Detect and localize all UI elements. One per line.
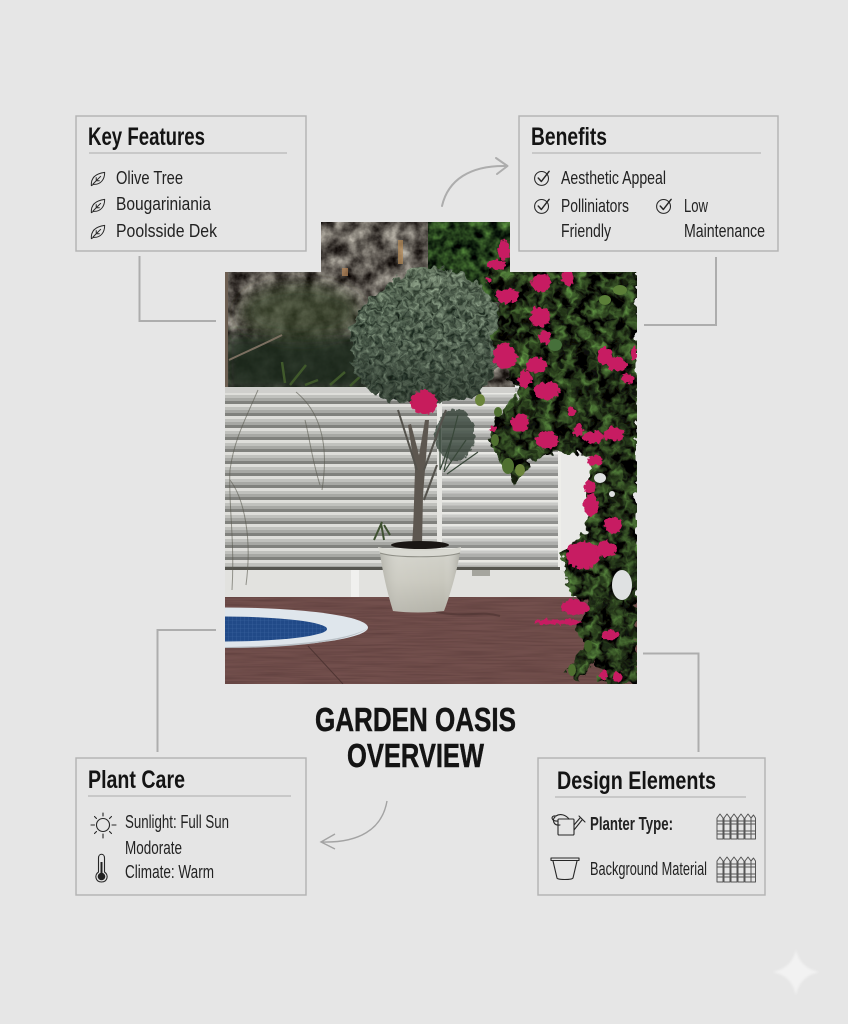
item: bougainvillea: Bougariniania	[116, 194, 212, 214]
photo: louvered fence	[225, 387, 560, 570]
photo: bougainvillea flowers	[486, 240, 637, 682]
icon: check	[535, 171, 549, 185]
photo: pool	[225, 608, 368, 648]
item: planter type: Planter Type:	[590, 814, 673, 834]
icon: check	[657, 199, 671, 213]
connector: plant care to photo	[158, 630, 216, 752]
heading: plant care: Plant Care	[88, 766, 185, 794]
panel: benefits	[519, 116, 778, 251]
panel: design elements	[538, 758, 765, 895]
icon: leaf	[91, 172, 105, 186]
item: background material: Background Material	[590, 859, 707, 879]
connector: key features to photo	[140, 256, 216, 321]
photo: hanging bougainvillea leaves	[475, 285, 627, 676]
photo: olive tree crown	[348, 265, 499, 404]
item: climate: Climate: Warm	[125, 862, 214, 882]
title: OVERVIEW	[347, 737, 485, 774]
photo: olive tree trunk and branches	[374, 410, 446, 545]
photo: spiky plant behind trunk	[435, 409, 478, 474]
item: pollinators friendly: Friendly	[561, 221, 611, 241]
item: olive tree: Olive Tree	[116, 168, 183, 188]
heading: key features: Key Features	[88, 123, 205, 151]
icon: leaf	[91, 225, 105, 239]
photo: pink flower on olive tree	[411, 390, 437, 414]
photo: vines on fence	[230, 390, 324, 590]
icon: leaf	[91, 199, 105, 213]
panel: plant care	[76, 758, 306, 895]
icon: watering can	[552, 815, 585, 835]
heading: design elements: Design Elements	[557, 767, 716, 795]
photo: bougainvillea foliage	[480, 225, 640, 685]
heading: benefits: Benefits	[531, 123, 607, 151]
item: low maintenance: Maintenance	[684, 221, 765, 241]
photo: planter pot	[378, 541, 461, 612]
photo: white wall gaps through foliage	[594, 473, 632, 600]
icon: sun	[91, 813, 116, 838]
icon: fence	[717, 857, 756, 882]
arrow: curved to plant care	[321, 801, 387, 849]
photo: timber deck	[225, 597, 637, 684]
photo: garden with olive tree, pot, pool and bougainvillea	[225, 222, 637, 684]
icon: sparkle	[773, 950, 819, 995]
item: poolside deck: Poolsside Dek	[116, 221, 218, 241]
photo: white base wall	[225, 570, 561, 597]
icon: fence	[717, 814, 756, 839]
photo: distant trees	[225, 222, 518, 393]
panel: key features	[76, 116, 306, 251]
connector: benefits to photo	[644, 257, 716, 325]
item: pollinators friendly: Polliniators	[561, 196, 629, 216]
connector: design elements to photo	[643, 654, 698, 752]
arrow: curved to benefits	[442, 158, 508, 206]
item: moderate: Modorate	[125, 838, 182, 858]
title: GARDEN OASIS	[315, 701, 516, 738]
item: aesthetic appeal: Aesthetic Appeal	[561, 168, 666, 188]
icon: planter pot	[551, 858, 579, 880]
item: low maintenance: Low	[684, 196, 709, 216]
icon: check	[535, 199, 549, 213]
item: sunlight: Sunlight: Full Sun	[125, 812, 229, 832]
icon: thermometer	[96, 854, 107, 882]
